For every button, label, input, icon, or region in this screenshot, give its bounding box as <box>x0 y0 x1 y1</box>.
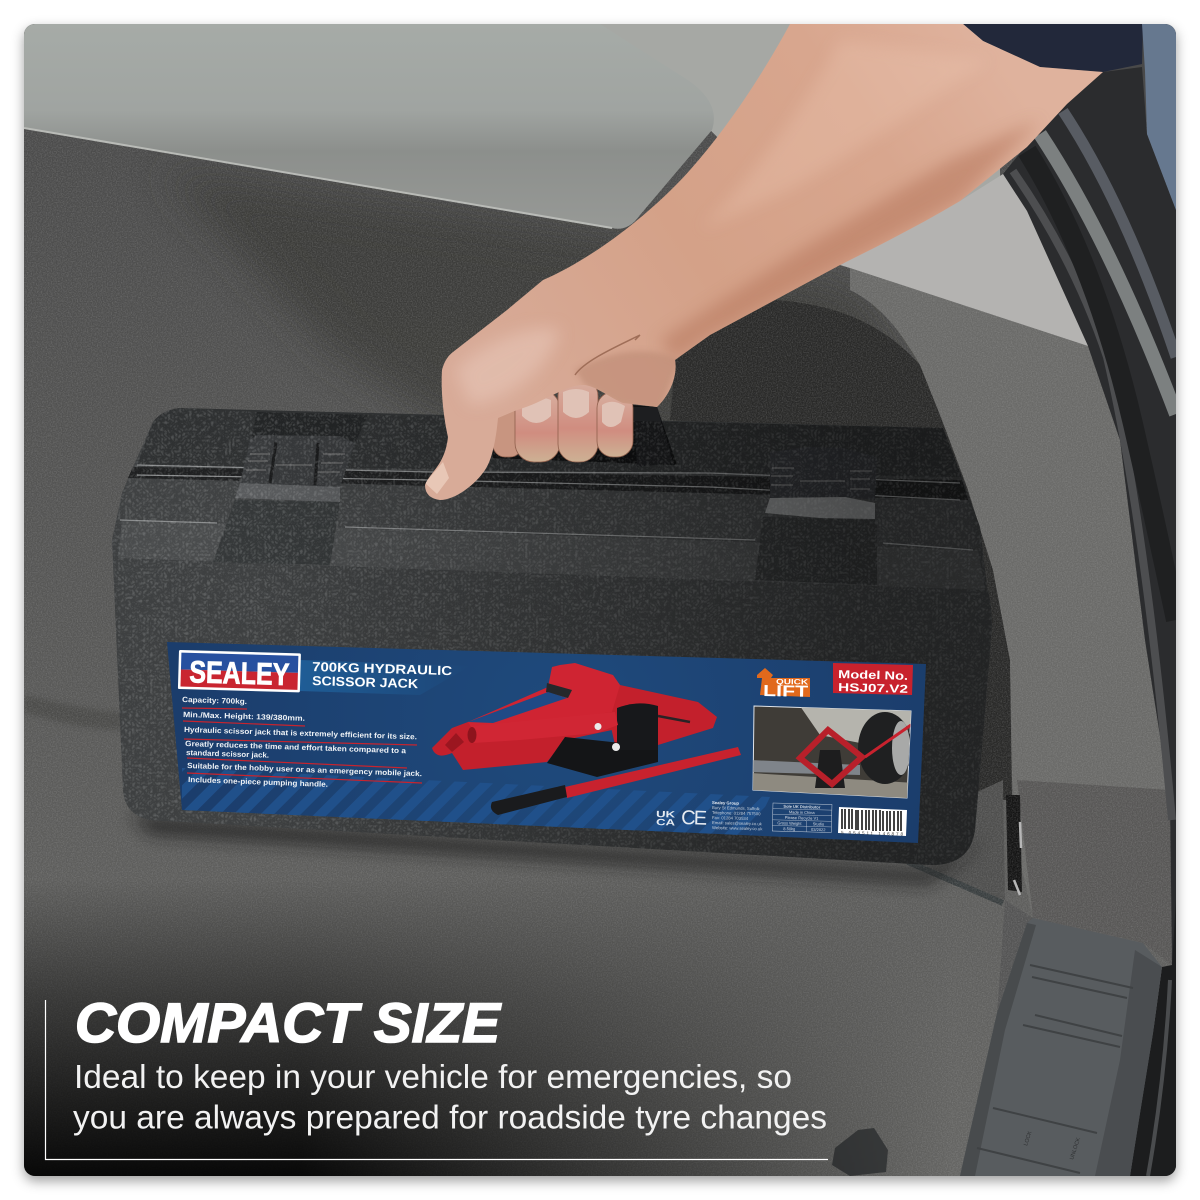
forearm and palm <box>425 24 1103 500</box>
case handle <box>633 407 673 467</box>
lid step <box>122 478 978 548</box>
caption frame <box>46 1000 828 1160</box>
door seal light <box>1040 134 1176 414</box>
jack black base <box>547 737 658 777</box>
jack saddle recess <box>546 683 572 698</box>
pebbled texture <box>108 404 998 869</box>
jack black cylinder <box>617 703 658 750</box>
distributor table: Studio <box>813 821 825 827</box>
sill right rim <box>1095 950 1162 1176</box>
dark slot with metal catch <box>1006 795 1022 892</box>
distributor table: Please Recycle V1 <box>785 815 819 821</box>
heading banner <box>300 660 470 695</box>
handle grip <box>491 785 567 815</box>
case body <box>112 408 992 865</box>
jack lower body <box>432 690 620 770</box>
door frame dark <box>1003 67 1176 1176</box>
case handle slot <box>490 405 677 465</box>
right side darkening <box>108 404 998 869</box>
small finger <box>493 405 522 457</box>
label title: SCISSOR JACK <box>312 673 419 691</box>
jack white bolts <box>595 723 620 751</box>
sill unlock marking: UNLOCK <box>1069 1137 1082 1161</box>
quick lift logo: LIFT <box>763 683 809 701</box>
middle finger <box>558 378 598 462</box>
feature list: Includes one-piece pumping handle. <box>188 775 328 789</box>
jack illustration <box>432 663 741 815</box>
inset jack <box>800 730 862 784</box>
lower right carpet shade <box>1017 780 1172 965</box>
label title <box>312 659 453 691</box>
quick lift logo <box>757 668 810 701</box>
label title: 700KG HYDRAULIC <box>312 659 453 678</box>
lid back panel <box>250 412 368 443</box>
left latch <box>240 435 355 487</box>
description text: you are always prepared for roadside tyre changes <box>73 1098 827 1136</box>
distributor table: 8.50kg <box>783 826 795 831</box>
distributor table: Gross Weight <box>777 820 803 826</box>
inset jack handle <box>865 725 911 757</box>
background jacket <box>1142 24 1176 210</box>
door seal dark <box>1027 151 1176 620</box>
heading: compact size: COMPACT SIZE <box>75 991 502 1054</box>
lid band <box>128 467 968 500</box>
red feature dividers <box>182 708 422 783</box>
compliance marks: CE <box>681 807 707 830</box>
model number badge <box>833 663 913 696</box>
distributor address <box>712 800 763 831</box>
boot sill plastic <box>960 918 1162 1176</box>
compliance marks: CA <box>656 817 676 828</box>
thumb tip nail <box>425 462 449 494</box>
door seal mid <box>1063 111 1176 357</box>
distributor table: Sole UK Distributor <box>783 804 821 810</box>
sill seal strip <box>1148 980 1170 1176</box>
floor recess beside case <box>924 780 1005 900</box>
palm shade <box>575 351 680 410</box>
metal catch <box>1014 822 1021 895</box>
ring finger <box>515 390 560 462</box>
distributor address: Bury St Edmunds, Suffolk <box>712 805 761 811</box>
arm highlight <box>700 40 990 230</box>
right latch <box>770 447 877 500</box>
left latch slots <box>246 454 345 472</box>
knuckle highlight <box>455 328 560 405</box>
upper trim behind <box>600 24 1000 202</box>
label background <box>167 642 926 843</box>
distributor table: Made in China <box>789 809 815 815</box>
floor seam strip <box>908 862 1003 903</box>
jack nose recess <box>445 733 464 752</box>
hand crease <box>575 335 640 375</box>
inset ground <box>750 773 915 800</box>
model number badge: Model No. <box>838 669 908 683</box>
piston opening <box>468 727 476 743</box>
right latch wedge <box>765 497 875 519</box>
carpet fold <box>24 695 125 730</box>
floor edge strip <box>997 900 1033 1013</box>
upper front <box>118 520 985 590</box>
jack rear arm <box>600 678 717 745</box>
barcode <box>838 807 907 837</box>
case floor shadow <box>130 815 985 885</box>
forearm lower shadow <box>660 120 1040 360</box>
distributor table: 03/2022 <box>811 827 826 832</box>
chevron stripes <box>182 768 770 838</box>
left latch wedge <box>235 483 340 502</box>
sleeve <box>963 24 1143 72</box>
feature list: Min./Max. Height: 139/380mm. <box>183 710 305 723</box>
tool case <box>108 404 998 869</box>
feature list: Capacity: 700kg. <box>182 695 247 706</box>
index finger <box>597 392 633 457</box>
description text: Ideal to keep in your vehicle for emergencies, so <box>74 1058 792 1095</box>
barcode: 5 054511 146878 <box>841 830 904 837</box>
feature list: Hydraulic scissor jack that is extremely efficient for its size. <box>184 725 417 741</box>
inset background band <box>750 760 860 775</box>
feature list: Greatly reduces the time and effort taken compared to a <box>185 739 407 755</box>
inset car body <box>800 706 915 743</box>
inset photo <box>750 706 915 800</box>
sill ribs <box>977 965 1133 1173</box>
right latch slots <box>771 468 872 489</box>
feature list: Suitable for the hobby user or as an emergency mobile jack. <box>187 761 422 778</box>
case ridge lines <box>120 465 973 550</box>
inset jack base <box>815 750 845 788</box>
case front face <box>118 558 992 865</box>
feature list <box>182 695 422 789</box>
inset wheel <box>892 721 910 775</box>
SEALEY logo: SEALEY <box>189 654 290 692</box>
pumping handle <box>565 747 741 798</box>
seal beside sill <box>1130 900 1176 1176</box>
quick lift logo: QUICK <box>776 677 809 687</box>
right carpet <box>850 268 1172 965</box>
trim lower edge <box>24 128 612 228</box>
distributor address: Telephone: 01284 757500 <box>712 810 761 816</box>
distributor address: Website: www.sealey.co.uk <box>712 825 763 831</box>
description text <box>73 1058 827 1136</box>
fingernails <box>522 389 625 427</box>
compliance marks <box>656 807 707 830</box>
model number badge: HSJ07.V2 <box>838 682 908 696</box>
inset tyre <box>858 712 912 784</box>
jack decal <box>468 692 567 723</box>
left trim panel <box>24 24 714 229</box>
distributor table <box>772 803 832 833</box>
distributor address: Fax: 01284 703534 <box>712 815 749 821</box>
arm and hand <box>425 24 1103 500</box>
carpet shadow under the trim <box>185 174 907 421</box>
compliance marks: UK <box>656 809 676 820</box>
left latch channels <box>270 442 318 485</box>
product label <box>167 642 926 843</box>
sill left rim <box>960 923 1036 1176</box>
door seal inner <box>1013 171 1172 820</box>
left latch foot <box>213 500 340 565</box>
jack top body <box>468 663 620 730</box>
lid top <box>137 408 962 477</box>
right latch foot <box>755 517 877 585</box>
feature list: standard scissor jack. <box>186 748 269 760</box>
fastener knob <box>832 1128 888 1176</box>
distributor address: Email: sales@sealey.co.uk <box>712 820 763 826</box>
distributor address: Sealey Group <box>712 800 740 806</box>
right trim panel <box>840 174 1088 346</box>
sill lock marking: LOCK <box>1023 1130 1034 1147</box>
jack rear arm slot <box>658 716 690 722</box>
recess shadow <box>670 299 1012 800</box>
jack piston arm <box>468 712 618 743</box>
bottom dark gradient <box>24 880 1176 1176</box>
